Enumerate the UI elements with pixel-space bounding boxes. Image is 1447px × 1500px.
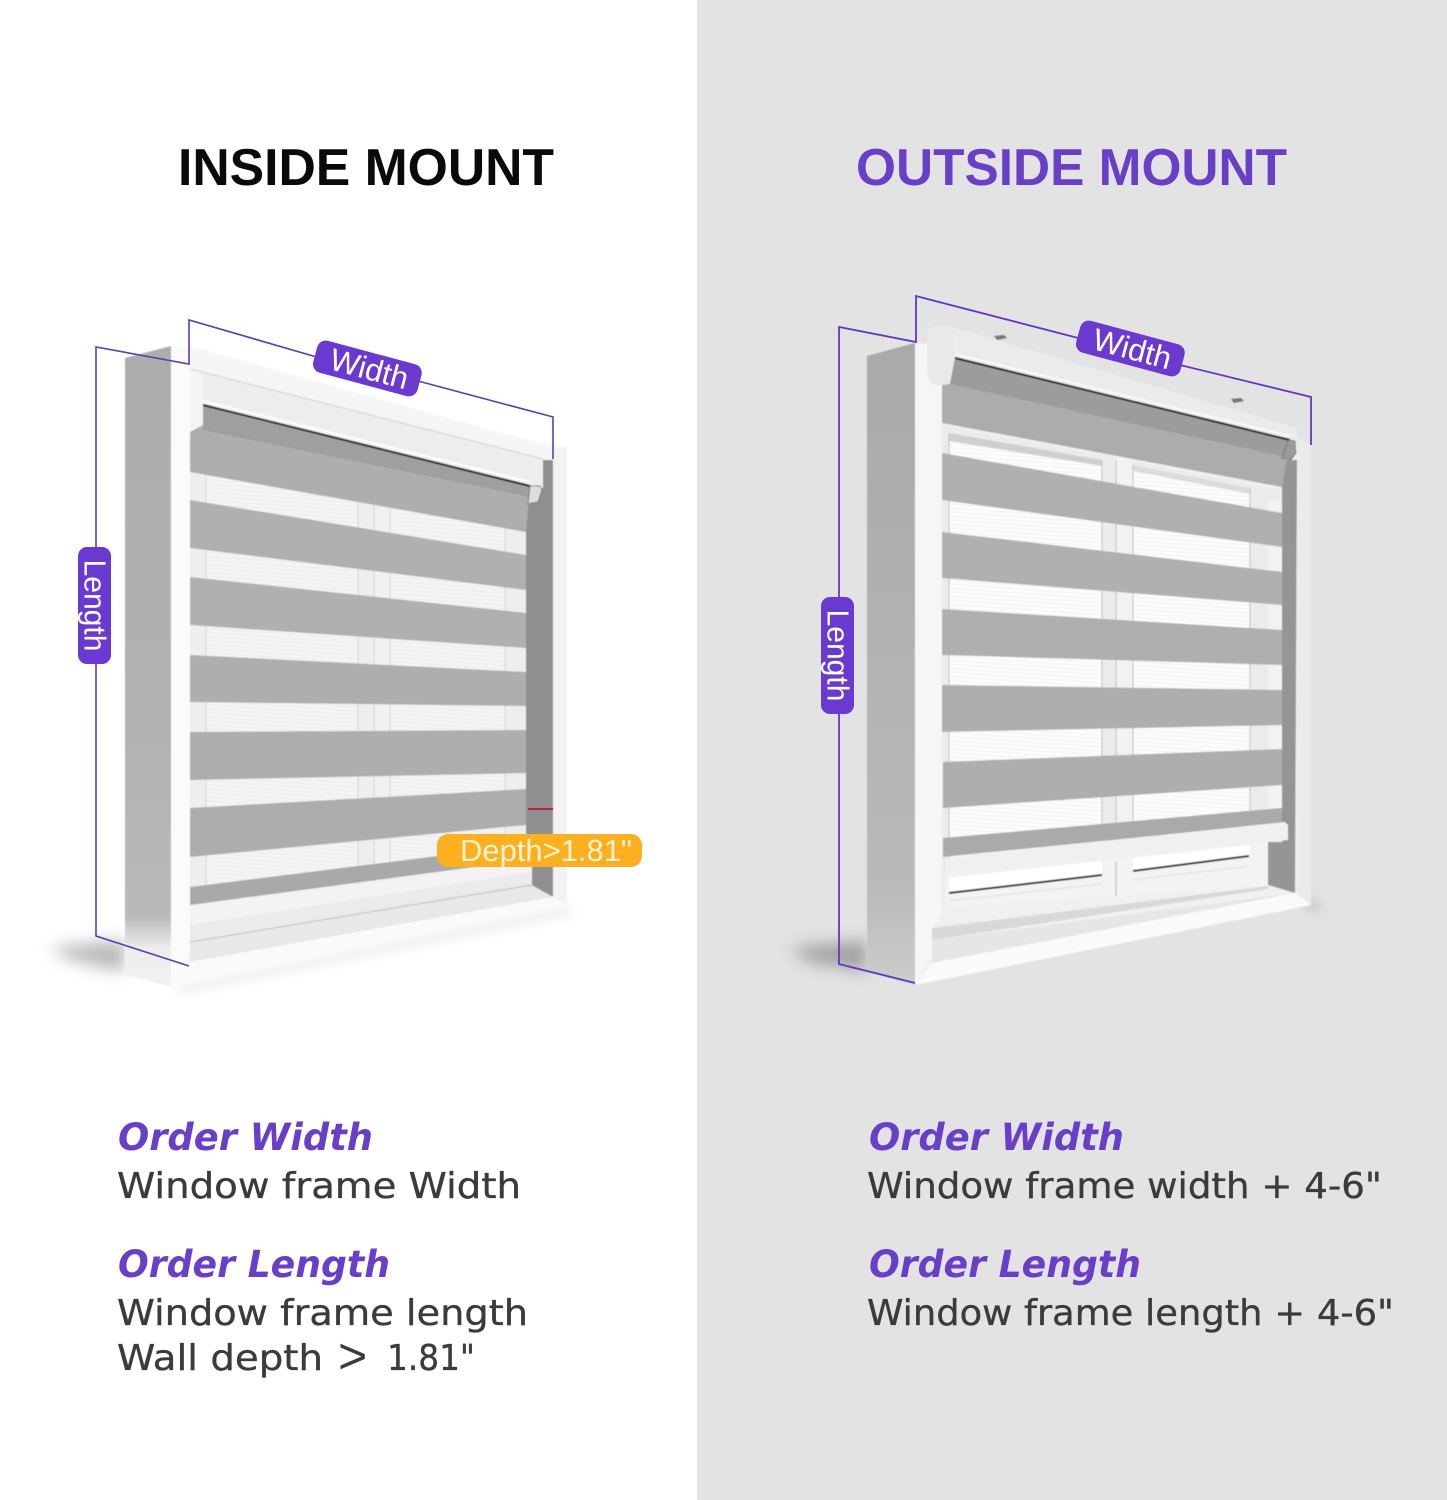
headrail: [955, 328, 1297, 445]
blind fabric bands: [942, 358, 1290, 487]
panel: inside mount background: [0, 0, 697, 1500]
lower glass panes: [949, 861, 1102, 892]
sill: [932, 886, 1295, 940]
frame face: [915, 343, 1311, 985]
text block: inside mount instructions: 1.81": [387, 1338, 475, 1379]
lower sash: [945, 842, 1268, 908]
title: outside mount: OUTSIDE MOUNT: [856, 139, 1287, 197]
left wall: [125, 346, 171, 987]
text block: outside mount instructions: Window frame width + 4-6": [867, 1166, 1382, 1207]
title: inside mount: INSIDE MOUNT: [178, 139, 554, 197]
right reveal wall: [526, 460, 553, 897]
text block: inside mount instructions: [117, 1116, 528, 1384]
top frame and headrail: [190, 350, 553, 460]
text block: inside mount instructions: Wall depth: [117, 1338, 323, 1379]
text block: inside mount instructions: Order Length: [118, 1243, 390, 1286]
panel: outside mount background: [697, 0, 1447, 1500]
text block: inside mount instructions: Window frame Width: [117, 1166, 521, 1207]
right frame strip: [553, 447, 567, 905]
bottom bar: [190, 861, 532, 942]
label: length (inside): Length: [78, 560, 112, 652]
depth marker: [528, 808, 553, 810]
text block: outside mount instructions: [867, 1116, 1394, 1334]
left wall: [867, 343, 915, 985]
shadow: [790, 940, 867, 972]
text block: outside mount instructions: Order Length: [869, 1243, 1141, 1286]
label: length (outside): Length: [820, 610, 856, 702]
shadow: [50, 940, 125, 972]
illustration: inside mount window: [50, 346, 575, 995]
frame face: [171, 346, 567, 987]
text block: outside mount instructions: Order Width: [869, 1116, 1124, 1159]
bottom bar: [945, 822, 1288, 878]
sill: [190, 882, 553, 962]
text block: inside mount instructions: Window frame length: [117, 1293, 528, 1334]
window behind blind: [942, 425, 1282, 908]
right reveal wall: [1268, 460, 1297, 893]
label: width (inside): [311, 338, 424, 399]
right frame strip: [1297, 437, 1311, 905]
text block: inside mount instructions: >: [338, 1328, 367, 1384]
dimension lines: outside mount: [839, 296, 1311, 983]
label: width (outside): Width: [1089, 322, 1175, 376]
illustration: outside mount window: [790, 326, 1325, 985]
label: depth callout: Depth>1.81": [460, 833, 632, 868]
text block: outside mount instructions: Window frame length + 4-6": [867, 1293, 1394, 1334]
label: width (outside): [1074, 318, 1187, 379]
text block: inside mount instructions: Order Width: [118, 1116, 373, 1159]
label: width (inside): Width: [326, 342, 412, 396]
dimension lines: inside mount: [96, 320, 553, 966]
glass strips: [190, 470, 526, 910]
blind fabric bands: [190, 405, 530, 532]
mounting clips: [994, 335, 1007, 340]
